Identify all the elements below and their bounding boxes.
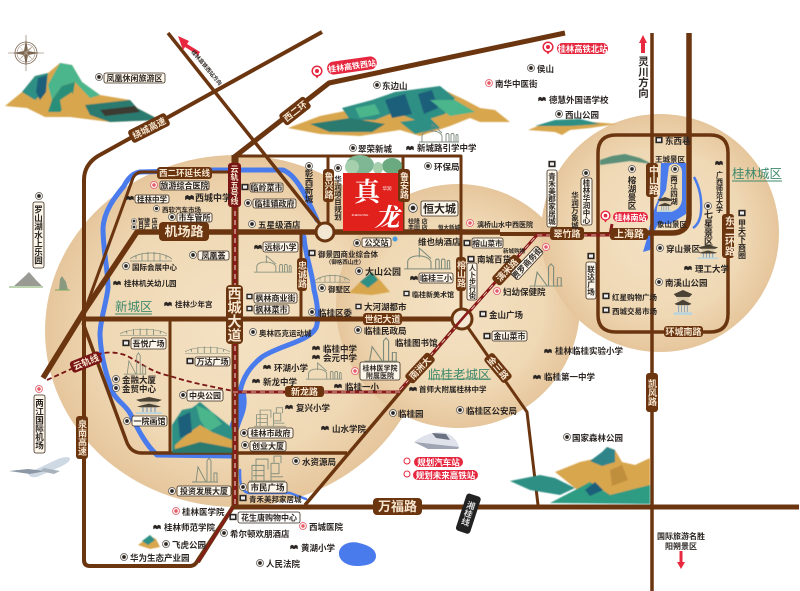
road label: 泉南高速: 泉南高速 [77, 418, 87, 456]
poi: 侯山: 侯山 [537, 64, 554, 74]
poi: 象山景区: 象山景区 [657, 219, 687, 229]
poi: 市车管所: 市车管所 [178, 212, 210, 222]
rivers [100, 170, 318, 499]
red arrow: Yangshuo [677, 551, 685, 569]
diagonal to high speed rail [168, 33, 320, 224]
mountain: top centre [288, 86, 510, 136]
poi: 创业大厦: 创业大厦 [252, 441, 284, 451]
poi: 中央公园 [179, 390, 223, 401]
poi: 侯山 [527, 64, 554, 74]
poi: 桂林中学 [126, 194, 169, 204]
poi: 王城景区: 王城景区 [655, 154, 685, 164]
poi: 枫林商业街: 枫林商业街 [256, 293, 296, 303]
poi: 桂林市政府 [240, 428, 293, 438]
airport road [43, 232, 500, 378]
poi: 临桂区委: 临桂区委 [318, 308, 353, 318]
poi: 人卜步行街 [467, 263, 477, 300]
station: 规划汽车站 [404, 457, 463, 467]
poi: 一院画馆: 一院画馆 [134, 416, 166, 426]
poi: 临桂园: 临桂园 [398, 409, 424, 419]
shanghai road [610, 33, 689, 233]
poi: 青禾美郡家居城: 青禾美郡家居城 [547, 171, 556, 226]
poi: 桂隆店 丰田店 恒大新城 [408, 218, 461, 232]
road label: 漓米路 [491, 253, 523, 287]
poi: 东西巷: 东西巷 [665, 136, 691, 146]
red arrow: Lingchuan [639, 35, 647, 53]
lower left line [198, 507, 233, 562]
city ring [598, 135, 728, 332]
road label: 金三路: 金三路 [485, 354, 511, 382]
panel: 真龙 project logo: ZHENLONG [352, 213, 369, 217]
poi: 金山菜市 [483, 331, 527, 341]
road label: 湘桂线 [455, 493, 481, 534]
mountain: national forest park [510, 447, 650, 504]
poi: 西软汽车市场 [153, 205, 202, 214]
rail lines [47, 175, 612, 562]
poi: 新城路引学中学: 新城路引学中学 [417, 143, 477, 153]
road label: 绕城高速 [127, 112, 171, 144]
poi: 妇幼保健院: 妇幼保健院 [503, 287, 546, 297]
icon: red hospital [542, 243, 550, 251]
poi: 红星购物广场: 红星购物广场 [612, 292, 657, 302]
poi: 临桂三小 [410, 273, 453, 283]
poi: 大河湖都市: 大河湖都市 [364, 302, 407, 312]
road label: 世纪大道: 世纪大道 [364, 313, 401, 324]
poi: 水资源局: 水资源局 [302, 457, 336, 467]
poi: 理工大学: 理工大学 [695, 264, 730, 274]
poi: 临桂民政局: 临桂民政局 [364, 326, 407, 336]
poi: 罗山湖水上乐园: 罗山湖水上乐园 [34, 205, 44, 266]
poi: 金融大厦: 金融大厦 [122, 375, 157, 385]
poi: 枫林菜市: 枫林菜市 [256, 304, 288, 314]
poi: 临岭菜市: 临岭菜市 [250, 182, 282, 192]
poi: 桂林医学院: 桂林医学院 [182, 507, 225, 517]
poi: 山水学院: 山水学院 [332, 424, 367, 434]
poi: 花生唐购物中心: 花生唐购物中心 [241, 512, 297, 522]
road label: 鲁兴路: 鲁兴路 [324, 171, 334, 200]
road label: 中山路: 中山路 [646, 164, 658, 196]
poi: 中央公园: 中央公园 [189, 390, 221, 400]
poi: 桂林中学: 桂林中学 [137, 194, 167, 204]
poi: 临桂第一中学: 临桂第一中学 [544, 372, 596, 382]
road label: 万福路: 万福路 [378, 499, 417, 514]
poi: 临桂一小: 临桂一小 [345, 382, 380, 392]
station: 规划汽车站: 规划汽车站 [417, 457, 460, 467]
poi: 华润万象城: 华润万象城 [570, 190, 580, 230]
station: 桂林高铁西站: 桂林高铁西站 [328, 58, 376, 74]
poi: 花生唐购物中心 [229, 512, 300, 523]
poi: 维也纳酒店: 维也纳酒店 [418, 237, 461, 247]
panel: 真龙 project logo [343, 155, 403, 234]
district heading: 临桂老城区: 临桂老城区 [428, 367, 491, 382]
small hill: Luoshan lake [9, 272, 70, 290]
jinshan road [462, 319, 538, 505]
poi: 华润项目规划: 华润项目规划 [333, 174, 342, 221]
poi: 金贸中心: 金贸中心 [122, 384, 157, 394]
station: 规划未来高铁站: 规划未来高铁站 [416, 470, 476, 480]
road label: 云轨五号线 [228, 163, 241, 207]
poi: 飞虎公园: 飞虎公园 [172, 540, 206, 550]
poi: 御景园商业综合体: （御格西山庄） [326, 258, 364, 266]
west second ring extension [85, 172, 234, 310]
road label: 西城大道: 西城大道 [226, 286, 242, 343]
lake [339, 542, 376, 566]
poi: 西山公园: 西山公园 [565, 110, 599, 120]
direction text: 阳朔 [657, 531, 705, 551]
mountain: top left [5, 63, 160, 122]
poi: 远标小学 [254, 242, 298, 252]
red arrow: to high speed rail [178, 36, 200, 55]
poi: 大山公园: 大山公园 [365, 266, 401, 277]
road label: 凯风路: 凯风路 [647, 378, 657, 407]
mountain: central park [172, 402, 232, 453]
district heading: 新城区: 新城区 [115, 299, 153, 314]
poi: 彰西新城: 彰西新城 [304, 168, 314, 204]
road label: 鲁安路: 鲁安路 [399, 171, 409, 200]
poi: 临桂中学: 临桂中学 [323, 344, 358, 354]
poi: 复兴小学: 复兴小学 [296, 403, 331, 413]
poi: 榕湖景区: 榕湖景区 [627, 175, 637, 210]
road label: 凯风路 [646, 373, 658, 412]
poi: 桂林少年宫 [164, 299, 212, 309]
poi: 桂林市政府: 桂林市政府 [250, 428, 290, 438]
poi: 旅游综合医院: 旅游综合医院 [160, 180, 208, 190]
poi: 桂隆店 丰田店 恒大新城: 丰田 店 [408, 224, 428, 232]
direction text: 灵川方向: 灵川方向 [637, 56, 649, 98]
road label: 云轨线: 云轨线 [71, 352, 101, 372]
poi: 桂林机关幼儿园: 桂林机关幼儿园 [124, 278, 176, 288]
century avenue [84, 316, 462, 322]
poi: 南溪山公园: 南溪山公园 [665, 278, 708, 288]
mountain: Daxing park [349, 272, 390, 295]
poi: 联达广场 [586, 253, 596, 299]
road label: 机场路: 机场路 [164, 224, 204, 239]
poi: 希尔顿欢朋酒店: 希尔顿欢朋酒店 [230, 529, 290, 539]
poi: 奥林匹克运动城: 奥林匹克运动城 [259, 328, 312, 338]
road label: 忠诚路: 忠诚路 [297, 260, 307, 289]
poi: 翠荣新城: 翠荣新城 [358, 144, 393, 154]
southwest diagonal [305, 319, 462, 505]
poi: 金山菜市: 金山菜市 [494, 331, 526, 341]
road label: 环城南路: 环城南路 [665, 326, 702, 337]
poi: 南城百货: 南城百货 [477, 254, 512, 264]
poi: 桂林华润中心: 桂林华润中心 [582, 178, 591, 224]
poi: 吾悦广场 [122, 338, 166, 349]
station: 桂林南站: 桂林南站 [614, 212, 646, 222]
poi: 两江国际机场: 两江国际机场 [34, 398, 44, 450]
poi: 凤凰荟: 凤凰荟 [202, 250, 226, 260]
ring expressway [84, 32, 322, 566]
poi: 穿山景区: 穿山景区 [666, 244, 701, 254]
road label: 泉南高速 [76, 416, 88, 459]
poi: 东边山: 东边山 [382, 81, 408, 91]
poi: 市民广场: 市民广场 [250, 482, 285, 492]
direction text: 阳朔: 国际旅游名胜 [657, 531, 705, 541]
panel: 真龙 project logo: 华润 [382, 185, 392, 192]
building line art [120, 124, 718, 482]
poi: 环湖小学: 环湖小学 [274, 363, 309, 373]
poi: 西城医院: 西城医院 [309, 522, 344, 532]
wanfu road [233, 504, 799, 510]
poi: 桂林临桂实验小学: 桂林临桂实验小学 [555, 346, 624, 356]
poi: 西软汽车市场: 西软汽车市场 [162, 205, 202, 214]
road label: 漓米路: 漓米路 [494, 256, 520, 283]
poi: 新城购物: 新城购物 [503, 247, 526, 255]
road label: 鲁安路 [398, 169, 410, 202]
poi: 西城交易市场: 西城交易市场 [612, 306, 657, 316]
icon: compass [8, 35, 44, 71]
poi: 智捷店 日产店 [131, 217, 158, 231]
poi: 漓桥山水中西医院: 漓桥山水中西医院 [477, 220, 533, 229]
poi: 会元中学: 会元中学 [323, 353, 358, 363]
poi: 临桂图书馆: 临桂图书馆 [395, 338, 438, 348]
poi: 一院画馆 [123, 416, 167, 426]
poi: 智捷店 日产店: 智捷 店 [138, 217, 158, 225]
poi: 德慧外国语学校: 德慧外国语学校 [549, 95, 609, 105]
panel: 真龙 project logo: 真 [354, 172, 384, 209]
poi: 临桂镇政府 [244, 198, 296, 208]
poi: 临桂三小: 临桂三小 [420, 273, 452, 283]
road label: 新龙路: 新龙路 [291, 386, 318, 397]
road label: 翠竹路: 翠竹路 [553, 228, 581, 239]
poi: 国家森林公园: 国家森林公园 [572, 433, 623, 443]
poi: 西城中学: 西城中学 [195, 192, 231, 203]
district heading: 桂林城区: 桂林城区 [732, 166, 782, 181]
poi: 人民法院: 人民法院 [266, 559, 301, 569]
poi: 漓桥山水中西医院 [466, 219, 533, 229]
poi: 公交站 [353, 236, 398, 248]
poi: 人卜步行街: 人卜步行街 [468, 264, 476, 300]
poi: 广西师范大学: 广西师范大学 [716, 170, 723, 213]
poi: 新龙中学: 新龙中学 [263, 377, 298, 387]
direction text: 阳朔: 阳朔景区 [665, 541, 697, 551]
poi: 两江国际机场 [34, 385, 45, 453]
road label: 上海路: 上海路 [614, 228, 644, 240]
poi: 两江四湖: 两江四湖 [669, 175, 678, 206]
road label: 南洲大桥 [404, 351, 436, 385]
station: 桂林高铁北站 [543, 42, 608, 54]
poi: 投资发展大厦: 投资发展大厦 [180, 486, 228, 496]
west avenue [232, 155, 238, 507]
poi: 南华中医街: 南华中医街 [495, 79, 538, 89]
poi: 黄湖小学: 黄湖小学 [301, 543, 336, 553]
river: city east branch [693, 177, 701, 228]
island: two rivers four lakes [657, 164, 682, 212]
poi: 桂隆店 丰田店 恒大新城: 恒大新城 [438, 224, 461, 232]
poi: 御墅区: 御墅区 [328, 284, 351, 294]
poi: 桂林医学院附属医院: 附属医院 [366, 371, 394, 380]
poi: 万达广场: 万达广场 [196, 356, 228, 366]
poi: 御景园商业综合体: 御景园商业综合体 [318, 249, 378, 259]
poi: 公交站: 公交站 [364, 238, 388, 248]
poi: 桂林少年宫: 桂林少年宫 [175, 299, 212, 309]
mountain: Feihu park [138, 535, 160, 549]
poi: 桂隆店 丰田店 恒大新城: 桂隆 店 [408, 218, 428, 226]
poi: 甲天下商圈: 甲天下商圈 [738, 219, 746, 260]
mountain: Ronghu [600, 154, 652, 165]
poi: 金山广场: 金山广场 [489, 310, 524, 320]
poi: 远标小学: 远标小学 [264, 242, 296, 252]
road label: 榕山路: 榕山路 [456, 259, 466, 288]
poi: 国际会展中心: 国际会展中心 [132, 262, 177, 272]
road label: 上海路 [610, 228, 648, 240]
icon: high speed train [414, 432, 459, 449]
poi: 桂山菜市: 榕山菜市 [472, 238, 503, 248]
poi: 吾悦广场: 吾悦广场 [132, 338, 164, 348]
kaifeng road [650, 33, 654, 591]
poi: 御墅区 [318, 284, 351, 294]
poi: 恒大城: 恒大城 [423, 202, 456, 216]
poi: 桂林师范学院: 桂林师范学院 [164, 522, 216, 532]
poi: 首师大附属桂林中学: 首师大附属桂林中学 [419, 384, 487, 394]
station: 桂林南站 [601, 211, 648, 222]
poi: 投资发展大厦 [168, 486, 231, 496]
west second ring [233, 33, 565, 158]
road label: 绕城高速: 绕城高速 [130, 115, 168, 141]
poi: 临桂区公安局: 临桂区公安局 [466, 406, 517, 416]
poi: 青禾美邦家居城: 青禾美邦家居城 [249, 494, 302, 504]
poi: 市车管所 [168, 212, 212, 222]
poi: 桂林华润中心 [581, 169, 592, 225]
road label: 云轨五号线: 云轨五号线 [230, 165, 239, 205]
poi: 七星景区: 七星景区 [703, 210, 713, 246]
direction text: high speed rail: 桂林高铁西站方向 [189, 48, 224, 87]
poi: 智捷店 日产店: 日产 店 [138, 223, 158, 231]
poi: 枫林菜市 [246, 304, 289, 314]
road label: 新龙路 [285, 386, 324, 397]
panel: 真龙 project logo: 龙 [374, 198, 402, 234]
poi: 临岭菜市 [241, 182, 283, 192]
poi: 桂林医学院附属医院: 桂林医学院 [362, 364, 398, 372]
poi: 环保局: 环保局 [434, 162, 460, 172]
poi: 凤凰休闲旅游区: 凤凰休闲旅游区 [106, 73, 162, 83]
poi: 创业大厦 [241, 441, 286, 451]
river: city lake [643, 163, 686, 252]
poi: 临桂新美术馆: 临桂新美术馆 [412, 290, 454, 299]
poi: 恒大城 [409, 201, 458, 216]
road label: 翠竹路 [550, 227, 584, 240]
panel: tan district circles [45, 114, 779, 537]
poi: 临桂新美术馆 [403, 290, 454, 299]
poi: 凤凰荟 [189, 250, 229, 260]
poi: 御景园商业综合体 [308, 249, 378, 266]
road label: 西二环延长线: 西二环延长线 [159, 168, 210, 178]
road label: 东二环路: 东二环路 [722, 215, 734, 257]
road label: 湘桂线: 湘桂线 [460, 499, 477, 527]
road label: 西二环: 西二环 [282, 99, 309, 124]
mountain: Xishan park [528, 119, 617, 135]
poi: 桂林医学院附属医院 [351, 362, 400, 380]
icon: plane [9, 457, 70, 477]
road label: 西二环 [278, 96, 312, 126]
poi: 临桂镇政府: 临桂镇政府 [254, 198, 294, 208]
station: 桂林高铁西站 [312, 56, 378, 78]
road label: 机场路 [159, 222, 209, 241]
poi: 贾罗商务街: 贾罗商务街 [510, 245, 544, 281]
road label: 南洲大桥: 南洲大 [407, 354, 433, 381]
poi: 联达广场: 联达广场 [586, 264, 596, 297]
poi: 五星级酒店: 五星级酒店 [258, 220, 301, 230]
poi: 市民广场 [239, 482, 287, 493]
poi: 万达广场 [186, 356, 230, 366]
station: 桂林高铁北站: 桂林高铁北站 [558, 44, 608, 54]
roundabouts [316, 223, 472, 329]
poi: 华为生态产业园: 华为生态产业园 [130, 553, 190, 563]
poi: 桂山菜市 [463, 238, 503, 248]
